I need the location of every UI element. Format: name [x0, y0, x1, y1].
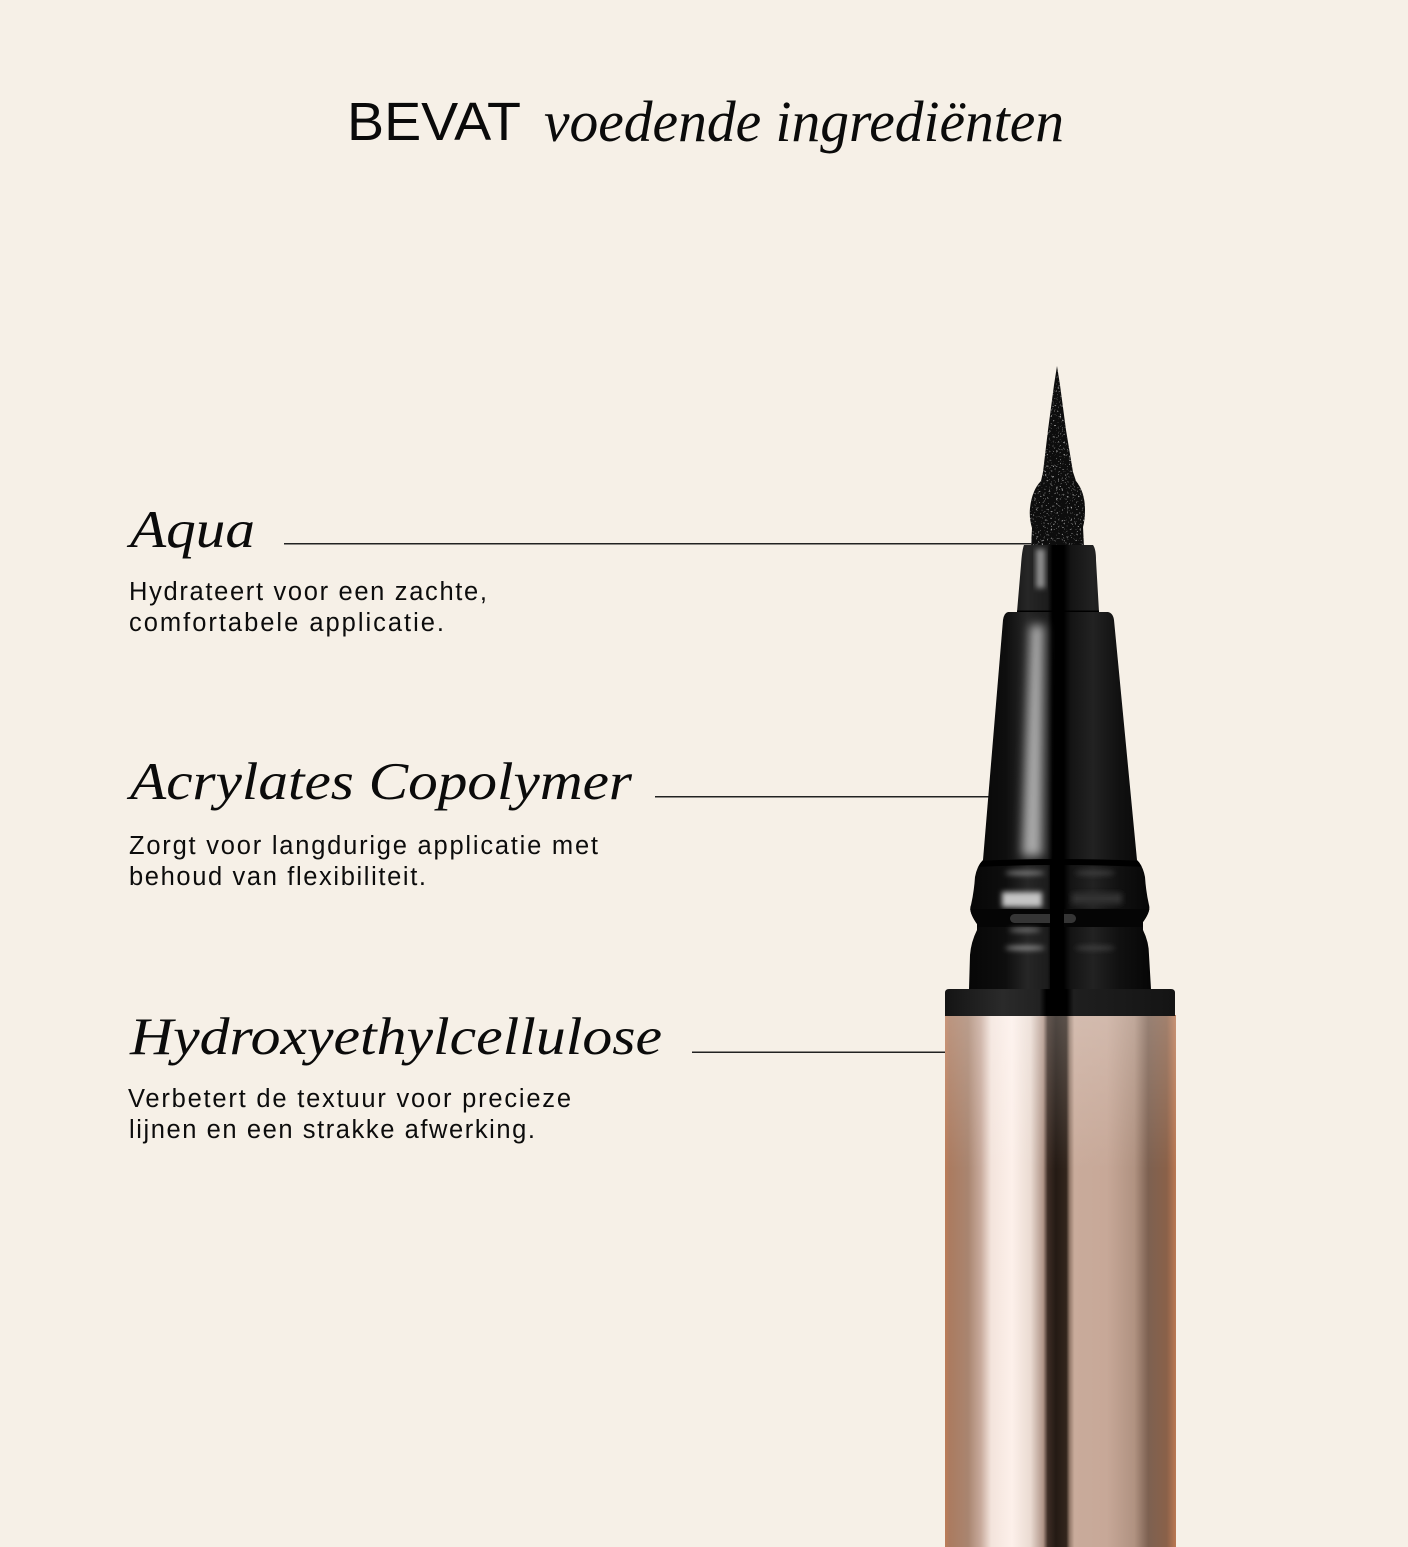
ingredient: Acrylates Copolymer: behoud van flexibiliteit. — [129, 863, 426, 891]
ingredient: Aqua: Hydrateert voor een zachte, — [129, 578, 487, 606]
ingredient: Aqua: comfortabele applicatie. — [129, 609, 444, 637]
ribbed collar — [968, 859, 1152, 990]
ingredient: Hydroxyethylcellulose: Hydroxyethylcellulose — [129, 1008, 662, 1066]
ingredient: Hydroxyethylcellulose: Verbetert de textuur voor precieze — [128, 1085, 571, 1113]
title: voedende ingrediënten — [544, 89, 1064, 154]
tapered cap — [965, 610, 1155, 990]
ingredient: Aqua — [127, 501, 487, 637]
nozzle section — [1017, 545, 1099, 612]
ingredient: Acrylates Copolymer — [127, 753, 632, 891]
ingredient: Hydroxyethylcellulose: lijnen en een strakke afwerking. — [129, 1116, 535, 1144]
ingredient: Acrylates Copolymer: Acrylates Copolymer — [127, 753, 632, 811]
leader line: Acrylates Copolymer — [655, 796, 989, 798]
ingredient: Aqua: Aqua — [127, 501, 255, 559]
pen body — [945, 1015, 1176, 1547]
eyeliner pen — [945, 366, 1176, 1547]
title: BEVAT — [347, 92, 521, 152]
felt tip — [1030, 366, 1085, 547]
flange — [945, 989, 1175, 1016]
leader line: Aqua — [284, 543, 1031, 544]
cap highlight — [1022, 625, 1044, 856]
body top sheen — [945, 1016, 1176, 1170]
leader line: Hydroxyethylcellulose — [692, 1052, 946, 1053]
ingredient: Hydroxyethylcellulose — [128, 1008, 662, 1144]
ingredient: Acrylates Copolymer: Zorgt voor langdurige applicatie met — [129, 832, 598, 860]
